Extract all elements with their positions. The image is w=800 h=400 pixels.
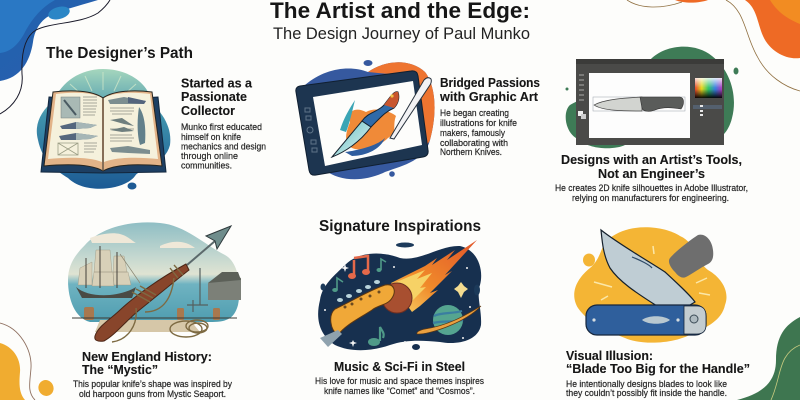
text block: graphic art: collaborating with — [440, 138, 508, 148]
text block: collector: Started as a — [181, 76, 253, 90]
text block: collector: mechanics and design — [181, 142, 266, 152]
text block: music and sci-fi: knife names like “Comet” and “Cosmos”. — [324, 386, 475, 396]
text block: collector: Munko first educated — [181, 122, 262, 132]
text block: collector: through online — [181, 151, 238, 161]
text block: graphic art: with Graphic Art — [439, 90, 539, 104]
text block: collector: communities. — [181, 160, 232, 170]
text block: graphic art: illustrations for knife — [440, 118, 517, 128]
heading: The Designer's Path: The Designer’s Path — [46, 45, 193, 62]
text block: Mystic: This popular knife’s shape was inspired by — [73, 379, 232, 389]
text block: graphic art: He began creating — [440, 108, 509, 118]
text block: Mystic: old harpoon guns from Mystic Seaport. — [79, 389, 226, 399]
icon: open book of knives — [37, 69, 170, 190]
corner decoration: green wave — [737, 317, 800, 400]
text block: graphic art — [439, 76, 540, 157]
text block: artist's tools: He creates 2D knife silhouettes in Adobe Illustrator, — [555, 183, 748, 193]
text block: visual illusion: “Blade Too Big for the Handle” — [566, 362, 750, 376]
text block: Mystic: New England History: — [82, 350, 212, 364]
text block: collector: himself on knife — [181, 132, 241, 142]
text block: graphic art: Bridged Passions — [440, 76, 540, 90]
text block: artist's tools: relying on manufacturers for engineering. — [572, 193, 729, 203]
corner decoration: yellow wave — [0, 323, 56, 400]
corner decoration: blue wave — [0, 0, 110, 114]
text block: visual illusion: they couldn’t possibly fit inside the handle. — [566, 388, 727, 398]
text block: Mystic: The “Mystic” — [82, 363, 158, 377]
text block: artist's tools — [555, 153, 748, 203]
corner decoration: orange wave — [627, 0, 800, 91]
text block: music and sci-fi — [315, 360, 484, 396]
icon: guitar, comet and planet — [318, 240, 481, 350]
text block: Mystic — [73, 350, 232, 399]
text block: music and sci-fi: Music & Sci-Fi in Steel — [334, 360, 465, 374]
text block: artist's tools: Designs with an Artist’s Tools, — [561, 153, 742, 167]
text block: collector: Collector — [181, 104, 235, 118]
icon: oversized blade folding knife — [574, 227, 726, 343]
text block: artist's tools: Not an Engineer’s — [598, 167, 705, 181]
icon: illustrator window — [566, 47, 738, 148]
text block: visual illusion — [566, 349, 750, 398]
text block: collector — [181, 76, 266, 170]
text block: graphic art: makers, famously — [440, 128, 505, 138]
text block: collector: Passionate — [181, 90, 247, 104]
text block: visual illusion: He intentionally designs blades to look like — [566, 379, 727, 389]
icon: tablet with knife art — [296, 60, 435, 179]
text block: visual illusion: Visual Illusion: — [566, 349, 653, 363]
subtitle: The Design Journey of Paul Munko — [273, 25, 530, 43]
icon: harpoon at harbor — [68, 222, 241, 342]
text block: graphic art: Northern Knives. — [440, 147, 502, 157]
text block: music and sci-fi: His love for music and space themes inspires — [315, 376, 484, 386]
heading: Signature Inspirations: Signature Inspirations — [319, 218, 481, 235]
